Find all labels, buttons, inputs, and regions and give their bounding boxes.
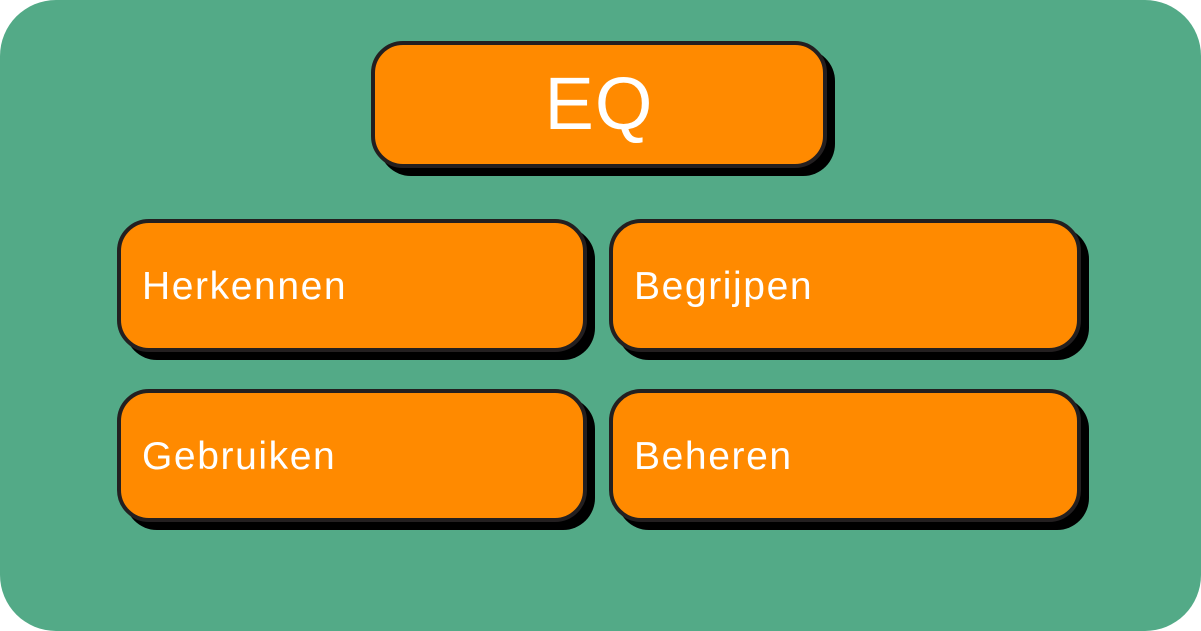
box: Beheren: Beheren [634,435,793,478]
box: Gebruiken: Gebruiken [142,435,336,478]
box: Gebruiken [117,389,587,522]
box: Begrijpen: Begrijpen [634,265,813,308]
box: Herkennen: Herkennen [142,265,347,308]
box: Herkennen [117,219,587,352]
box: Begrijpen [609,219,1081,352]
title box: EQ: EQ [545,62,653,145]
box: Beheren [609,389,1081,522]
title box: EQ [371,41,827,168]
